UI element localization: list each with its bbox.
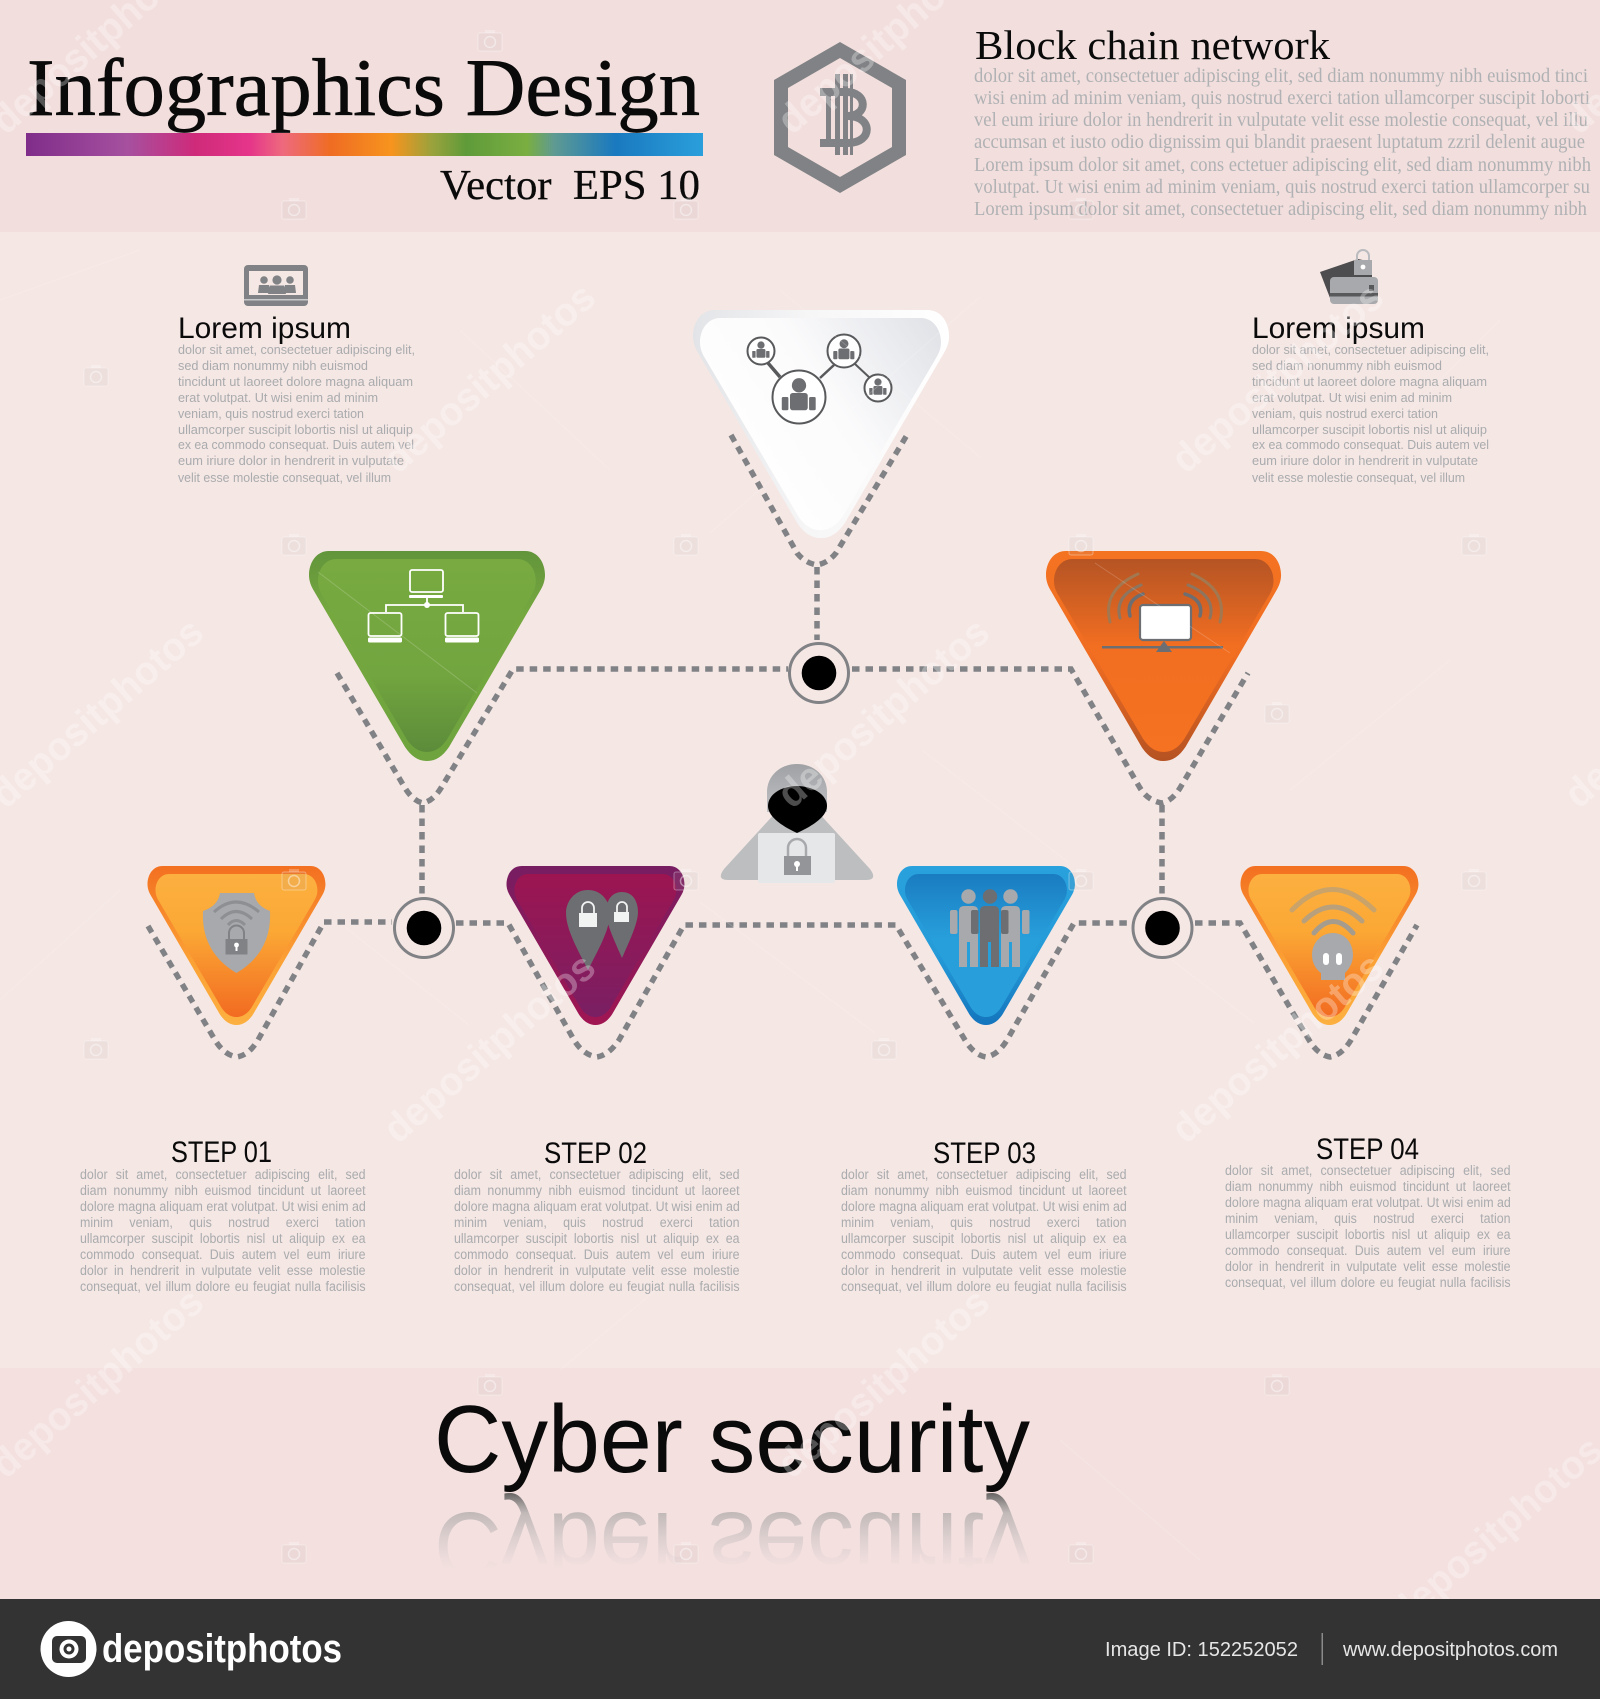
banner title: cyber security: Cyber security (434, 1386, 1030, 1493)
text block: right lorem ipsum: ullamcorper suscipit lobortis nisl ut aliquip (1252, 422, 1487, 437)
icon: laptop with group of people (244, 265, 308, 306)
text block: left lorem ipsum: sed diam nonummy nibh euismod (178, 358, 368, 373)
watermark: repeated stock photo marks: depositphotos (1163, 945, 1392, 1152)
text block: step 02: consequat, vel illum dolore eu feugiat nulla facilisis (454, 1278, 739, 1294)
text block: step 01: minim veniam, quis nostrud exerci tation (80, 1214, 366, 1230)
text block: step 01: ullamcorper suscipit lobortis nisl ut aliquip ex ea (80, 1230, 366, 1246)
text block: step 04: dolore magna aliquam erat volutpat. Ut wisi enim ad (1225, 1195, 1511, 1210)
text block: step 01: dolore magna aliquam erat volutpat. Ut wisi enim ad (80, 1198, 366, 1214)
text block: step 04: commodo consequat. Duis autem vel eum iriure (1225, 1243, 1511, 1258)
icon: hexagon bitcoin (774, 42, 906, 193)
heading: right lorem ipsum: Lorem ipsum (1252, 312, 1425, 345)
text block: step 01: dolor sit amet, consectetuer adipiscing elit, sed (80, 1166, 366, 1182)
footer website: www.depositphotos.com (1342, 1639, 1558, 1661)
panel: white triangle with people network (693, 310, 949, 538)
text block: right lorem ipsum: veniam, quis nostrud exerci tation (1252, 406, 1438, 421)
text block: block chain description: volutpat. Ut wisi enim ad minim veniam, quis nostrud exerci tation ullamcorper su (974, 177, 1590, 198)
icon: wifi skull (1292, 890, 1374, 980)
heading: step 01: STEP 01 (171, 1136, 272, 1169)
dashed connector network (148, 435, 1417, 1057)
text block: left lorem ipsum: erat volutpat. Ut wisi enim ad minim (178, 390, 378, 405)
text block: step 04: dolor sit amet, consectetuer adipiscing elit, sed (1225, 1163, 1511, 1178)
text block: block chain description: accumsan et iusto odio dignissim qui blandit praesent luptatum zzril delenit augue (974, 132, 1585, 153)
text block: step 03: dolor in hendrerit in vulputate velit esse molestie (841, 1262, 1127, 1278)
text block: left lorem ipsum: ex ea commodo consequat. Duis autem vel (178, 437, 414, 452)
text block: step 01: consequat, vel illum dolore eu feugiat nulla facilisis (80, 1278, 366, 1294)
bottom band (0, 1368, 1600, 1599)
text block: step 01: dolor in hendrerit in vulputate velit esse molestie (80, 1262, 366, 1278)
watermark: camera marks (84, 30, 1486, 1563)
text block: step 03: consequat, vel illum dolore eu feugiat nulla facilisis (841, 1278, 1127, 1294)
text block: block chain description: dolor sit amet, consectetuer adipiscing elit, sed diam nonummy nibh euismod tinci (974, 66, 1589, 87)
icon: computer network (368, 570, 479, 642)
icon: wifi shield lock (203, 893, 270, 973)
footer brand name: depositphotos (102, 1627, 342, 1671)
text block: right lorem ipsum: dolor sit amet, consectetuer adipiscing elit, (1252, 342, 1489, 357)
text block: right lorem ipsum: tincidunt ut laoreet dolore magna aliquam (1252, 374, 1487, 389)
footer divider (1322, 1633, 1323, 1665)
text block: step 04: ullamcorper suscipit lobortis nisl ut aliquip ex ea (1225, 1227, 1511, 1242)
text block: step 02: dolore magna aliquam erat volutpat. Ut wisi enim ad (454, 1198, 739, 1214)
subtitle: Vector EPS 10 (440, 163, 700, 209)
icon: people network (748, 334, 892, 424)
node: right junction (1133, 898, 1192, 958)
text block: block chain description: vel eum iriure dolor in hendrerit in vulputate velit esse molestie consequat, vel illu (974, 110, 1588, 131)
panel: step 02 triangle with location locks (506, 866, 684, 1025)
text block: right lorem ipsum: velit esse molestie consequat, vel illum (1252, 470, 1465, 485)
text block: right lorem ipsum: ex ea commodo consequat. Duis autem vel (1252, 437, 1489, 452)
text block: step 03: dolor sit amet, consectetuer adipiscing elit, sed (841, 1166, 1127, 1182)
text block: right lorem ipsum: erat volutpat. Ut wisi enim ad minim (1252, 390, 1452, 405)
text block: step 02: ullamcorper suscipit lobortis nisl ut aliquip ex ea (454, 1230, 739, 1246)
watermark: repeated stock photo marks: depositphotos (769, 610, 998, 817)
text block: step 04: dolor in hendrerit in vulputate velit esse molestie (1225, 1259, 1511, 1274)
panel: dark orange triangle with wireless monitor (1046, 551, 1281, 761)
text block: step 02: diam nonummy nibh euismod tincidunt ut laoreet (454, 1182, 739, 1198)
text block: step 03: dolore magna aliquam erat volutpat. Ut wisi enim ad (841, 1198, 1127, 1214)
rainbow colour bar (26, 133, 703, 156)
text block: step 03: diam nonummy nibh euismod tincidunt ut laoreet (841, 1182, 1127, 1198)
banner title reflection: Cyber security (434, 1492, 1030, 1599)
text block: left lorem ipsum: velit esse molestie consequat, vel illum (178, 470, 391, 485)
text block: step 04: minim veniam, quis nostrud exerci tation (1225, 1211, 1511, 1226)
heading: step 03: STEP 03 (933, 1137, 1036, 1170)
text block: step 03 (841, 1166, 1127, 1294)
panel: step 04 triangle with skull (1240, 866, 1418, 1025)
watermark: faint lattice lines (0, 250, 1500, 1560)
text block: right lorem ipsum (1252, 342, 1489, 485)
text block: step 02: dolor in hendrerit in vulputate velit esse molestie (454, 1262, 739, 1278)
text block: block chain description (974, 66, 1591, 220)
text block: step 01 (80, 1166, 366, 1294)
text block: step 02 (454, 1166, 740, 1294)
text block: step 01: commodo consequat. Duis autem vel eum iriure (80, 1246, 366, 1262)
text block: step 01: diam nonummy nibh euismod tincidunt ut laoreet (80, 1182, 366, 1198)
text block: step 03: ullamcorper suscipit lobortis nisl ut aliquip ex ea (841, 1230, 1127, 1246)
icon: hooded hacker with lock (721, 764, 873, 883)
watermark: repeated stock photo marks: depositphotos (375, 275, 604, 482)
text block: step 03: minim veniam, quis nostrud exerci tation (841, 1214, 1127, 1230)
text block: left lorem ipsum (178, 342, 415, 485)
panel: step 03 triangle with team (897, 866, 1075, 1025)
icon: group of three people (950, 889, 1030, 967)
heading: left lorem ipsum: Lorem ipsum (178, 312, 351, 345)
watermark: repeated stock photo marks: depositphotos (769, 1280, 998, 1487)
watermark: repeated stock photo marks: depositphotos (1163, 275, 1392, 482)
text block: left lorem ipsum: tincidunt ut laoreet dolore magna aliquam (178, 374, 413, 389)
footer bar (0, 1599, 1600, 1699)
text block: left lorem ipsum: eum iriure dolor in hendrerit in vulputate (178, 453, 404, 468)
text block: right lorem ipsum: sed diam nonummy nibh euismod (1252, 358, 1442, 373)
icon: location pins with locks (566, 890, 638, 970)
icon: wallet with lock (1320, 250, 1378, 304)
title: Infographics Design (27, 42, 700, 133)
icon: footer logo camera (40, 1621, 96, 1677)
text block: step 02: minim veniam, quis nostrud exerci tation (454, 1214, 739, 1230)
text block: block chain description: Lorem ipsum dolor sit amet, consectetuer adipiscing elit, sed diam nonummy nibh (974, 199, 1587, 220)
footer image id: Image ID: 152252052 (1105, 1639, 1298, 1661)
watermark: repeated stock photo marks: depositphotos (375, 945, 604, 1152)
text block: left lorem ipsum: veniam, quis nostrud exerci tation (178, 406, 364, 421)
heading: step 02: STEP 02 (544, 1137, 647, 1170)
header band (0, 0, 1600, 232)
node: left junction (394, 898, 454, 958)
text block: left lorem ipsum: dolor sit amet, consectetuer adipiscing elit, (178, 342, 415, 357)
text block: right lorem ipsum: eum iriure dolor in hendrerit in vulputate (1252, 453, 1478, 468)
text block: left lorem ipsum: ullamcorper suscipit lobortis nisl ut aliquip (178, 422, 413, 437)
text block: step 02: commodo consequat. Duis autem vel eum iriure (454, 1246, 739, 1262)
panel: green triangle with computer network (309, 551, 545, 761)
text block: step 04 (1225, 1163, 1511, 1290)
node: top junction (790, 644, 848, 702)
text block: step 04: consequat, vel illum dolore eu feugiat nulla facilisis (1225, 1275, 1511, 1290)
heading: step 04: STEP 04 (1316, 1133, 1419, 1166)
icon: wireless monitor (1102, 574, 1223, 652)
heading: block chain network: Block chain network (975, 22, 1331, 68)
text block: step 02: dolor sit amet, consectetuer adipiscing elit, sed (454, 1166, 739, 1182)
text block: step 03: commodo consequat. Duis autem vel eum iriure (841, 1246, 1127, 1262)
panel: step 01 triangle with shield (148, 866, 325, 1025)
text block: step 04: diam nonummy nibh euismod tincidunt ut laoreet (1225, 1179, 1511, 1194)
